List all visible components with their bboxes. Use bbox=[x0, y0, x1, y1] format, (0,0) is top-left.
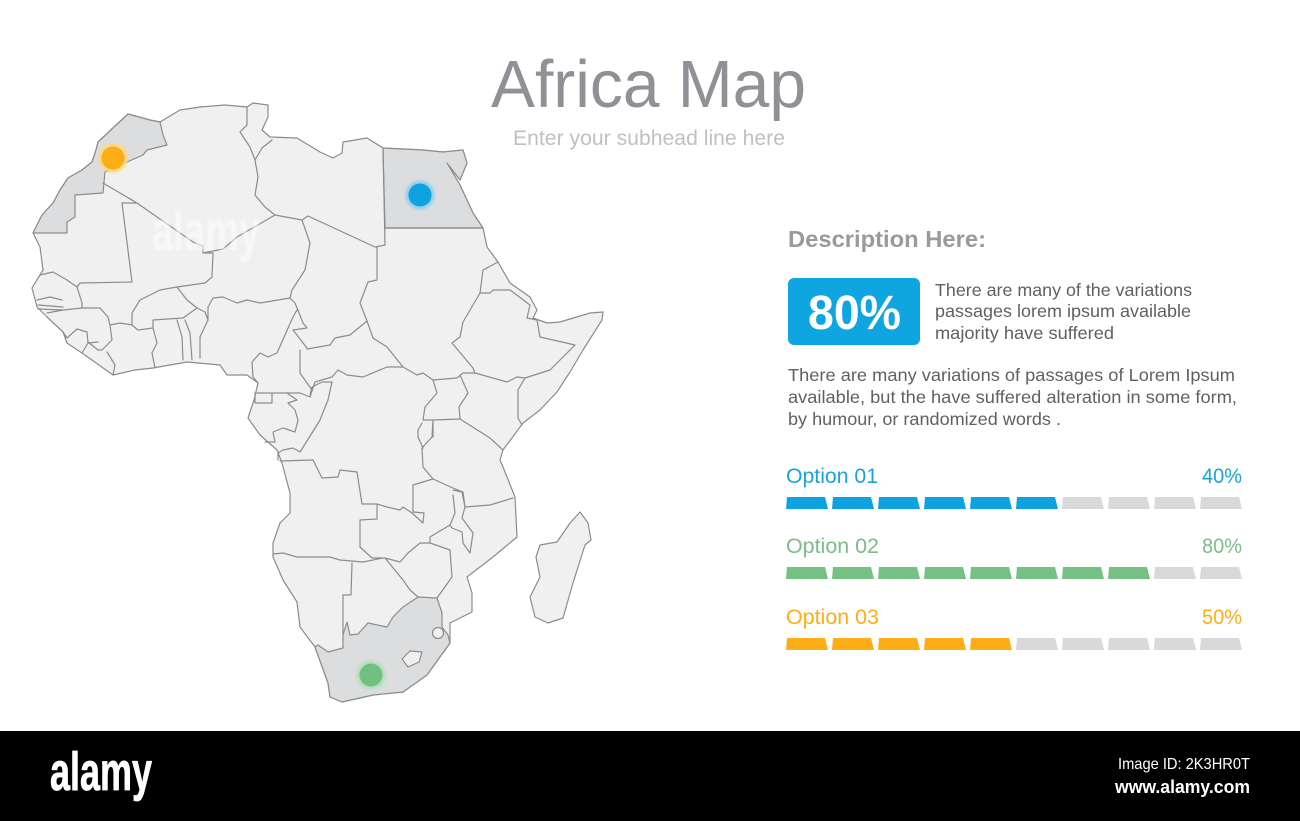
highlighted country: Egypt bbox=[383, 148, 483, 228]
stat badge: 80%: 80% bbox=[808, 287, 901, 340]
title: Africa Map bbox=[491, 47, 806, 122]
badge text bbox=[935, 280, 1192, 343]
highlighted country: South Africa bbox=[315, 597, 450, 702]
paragraph: There are many variations of passages of Lorem Ipsum bbox=[788, 365, 1235, 385]
footer bar: www.alamy.com bbox=[1114, 777, 1250, 797]
continent landmass bbox=[32, 103, 603, 702]
watermark on map: alamy bbox=[152, 199, 260, 262]
internal country borders bbox=[37, 107, 575, 635]
option 02 progress: 80% bbox=[1202, 535, 1242, 558]
Lesotho bbox=[402, 651, 422, 667]
footer bar: Image ID: 2K3HR0T bbox=[1118, 756, 1250, 773]
marker: green dot on South Africa bbox=[356, 660, 386, 690]
subhead: Enter your subhead line here bbox=[513, 127, 785, 150]
option 02 progress bbox=[786, 535, 1242, 579]
paragraph: by humour, or randomized words . bbox=[788, 409, 1061, 429]
Madagascar bbox=[530, 512, 591, 623]
highlighted country: Morocco and Western Sahara bbox=[33, 114, 167, 233]
badge text: majority have suffered bbox=[935, 323, 1114, 343]
option 01 progress: 40% bbox=[1202, 465, 1242, 488]
badge text: passages lorem ipsum available bbox=[935, 301, 1191, 321]
option 03 progress bbox=[786, 606, 1242, 650]
option 03 progress: 50% bbox=[1202, 606, 1242, 629]
option 03 progress: Option 03 bbox=[786, 606, 879, 629]
paragraph: available, but the have suffered alteration in some form, bbox=[788, 387, 1237, 407]
map of Africa bbox=[32, 103, 603, 702]
paragraph bbox=[788, 365, 1237, 429]
option 01 progress: Option 01 bbox=[786, 465, 878, 488]
marker: blue dot on Egypt bbox=[406, 180, 434, 210]
marker: orange dot on Morocco bbox=[98, 144, 128, 172]
option 01 progress bbox=[786, 465, 1242, 509]
option 02 progress: Option 02 bbox=[786, 535, 879, 558]
stat badge: 80% bbox=[788, 278, 920, 345]
footer bar bbox=[0, 731, 1300, 821]
Eswatini bbox=[432, 628, 444, 638]
description heading: Description Here: bbox=[788, 226, 986, 252]
footer bar: alamy bbox=[50, 742, 152, 802]
badge text: There are many of the variations bbox=[935, 280, 1192, 300]
